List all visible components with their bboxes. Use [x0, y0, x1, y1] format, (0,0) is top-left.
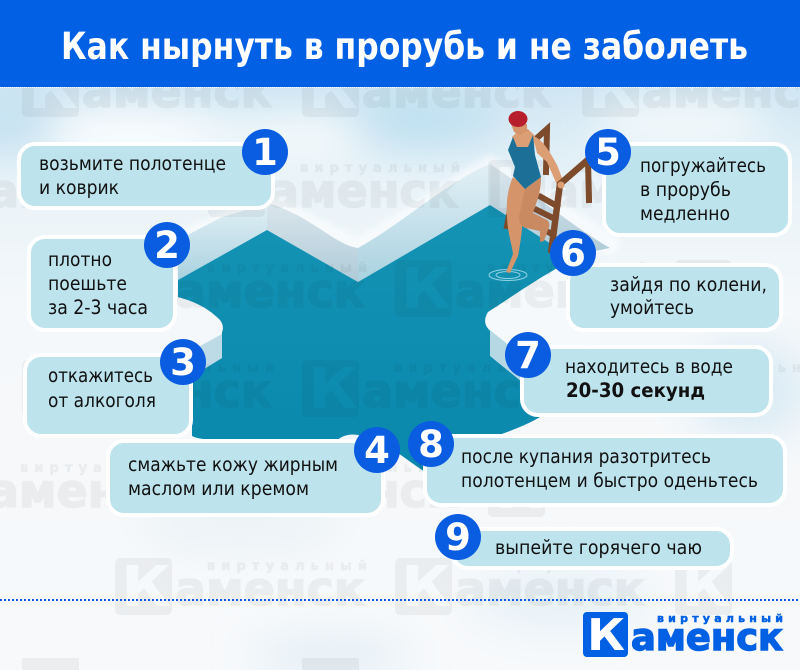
snow lobe right: [485, 262, 600, 368]
step 8: 8: [418, 423, 444, 466]
watermark logos: виртуальный: [394, 361, 554, 376]
step 5: [585, 129, 790, 235]
step 6: зайдя по колени,: [610, 273, 767, 296]
step 5: 5: [595, 131, 621, 174]
step 4: маслом или кремом: [128, 477, 309, 500]
swimsuit: [508, 135, 541, 189]
watermark logos: виртуальный: [487, 559, 647, 574]
watermark logos: аменск: [455, 264, 645, 318]
logo: virtual Kamensk: К: [587, 610, 625, 661]
face: [511, 124, 527, 135]
snow lobe left: [165, 295, 223, 356]
watermark logos: виртуальный: [580, 461, 740, 476]
step 7: находитесь в воде: [565, 355, 733, 378]
step 2: [29, 222, 190, 330]
step 6: умойтесь: [610, 296, 694, 319]
watermark logos: аменск: [455, 562, 645, 616]
watermark logos: виртуальный: [394, 61, 554, 76]
step 8: после купания разотритесь: [461, 445, 711, 468]
step 5: медленно: [640, 202, 730, 225]
step 8: полотенцем и быстро оденьтесь: [461, 469, 758, 492]
step 4: 4: [364, 429, 390, 472]
watermark logos: виртуальный: [20, 161, 180, 176]
watermark logos: аменск: [362, 64, 552, 118]
step 9: выпейте горячего чаю: [495, 536, 702, 559]
step 2: 2: [154, 224, 180, 267]
watermark logos: виртуальный: [300, 461, 460, 476]
step 4: [108, 427, 400, 515]
snow bottom bumps: [335, 434, 372, 442]
watermark logos: виртуальный: [114, 361, 274, 376]
step 6: 6: [560, 232, 586, 275]
watermark logos: аменск: [362, 364, 552, 418]
torso skin: [512, 129, 535, 150]
ice wall back: [358, 164, 490, 282]
step 3: 3: [170, 341, 196, 384]
swim cap: [508, 111, 528, 127]
step 4: смажьте кожу жирным: [128, 453, 338, 476]
step 3: откажитесь: [48, 364, 153, 387]
wall lobe left: [193, 334, 222, 376]
step 9: [435, 514, 732, 568]
watermark logos: виртуальный: [300, 161, 460, 176]
step 3: от алкоголя: [48, 389, 156, 412]
ladder and swimmer: [489, 111, 590, 280]
step 3: [25, 339, 206, 436]
step 6: [550, 230, 781, 330]
watermark logos: аменск: [175, 562, 365, 616]
ice wall middle: [267, 203, 358, 282]
ice hole: [165, 154, 620, 472]
logo: virtual Kamensk: [583, 610, 783, 661]
step 1: и коврик: [39, 176, 119, 199]
watermark logos: аменск: [268, 164, 458, 218]
step 8: [408, 421, 785, 505]
logo: virtual Kamensk: виртуальный: [657, 612, 783, 625]
watermark logos: аменск: [82, 64, 272, 118]
water ripples: [489, 270, 527, 280]
step 1: 1: [252, 131, 278, 174]
watermark logos: виртуальный: [487, 261, 647, 276]
watermark logos: аменск: [82, 364, 272, 418]
watermark logos: виртуальный: [207, 559, 367, 574]
ice wall right: [490, 164, 610, 256]
wall lobe right: [490, 330, 537, 382]
watermark logos: аменск: [268, 464, 458, 518]
watermark logos: аменск: [548, 164, 738, 218]
step 9: 9: [445, 516, 471, 559]
step 7: [505, 332, 771, 415]
step 7: 20-30 секунд: [566, 379, 705, 402]
ice wall left: [178, 203, 267, 280]
swimmer: [506, 111, 564, 273]
standing leg: [506, 177, 527, 273]
step 1: [19, 129, 288, 208]
watermark logos: аменск: [175, 264, 365, 318]
watermark logos: виртуальный: [207, 261, 367, 276]
step 5: погружайтесь: [640, 154, 766, 177]
logo: virtual Kamensk: аменск: [631, 616, 783, 659]
watermark logos: виртуальный: [20, 461, 180, 476]
header band: [0, 0, 800, 88]
watermark logos: виртуальный: [580, 161, 740, 176]
step 2: плотно: [48, 248, 112, 271]
ice rim: [165, 154, 620, 258]
bent leg: [519, 177, 549, 242]
step 7: 7: [515, 334, 541, 377]
step 1: возьмите полотенце: [39, 152, 226, 175]
step 2: за 2-3 часа: [48, 296, 148, 319]
step 5: в прорубь: [640, 178, 731, 201]
hand: [558, 182, 564, 188]
ladder front rail: [551, 158, 590, 253]
arm: [533, 136, 564, 188]
ladder back rails: [507, 129, 589, 233]
step 2: поешьте: [48, 272, 127, 295]
water: [178, 205, 570, 472]
watermark logos: виртуальный: [114, 61, 274, 76]
